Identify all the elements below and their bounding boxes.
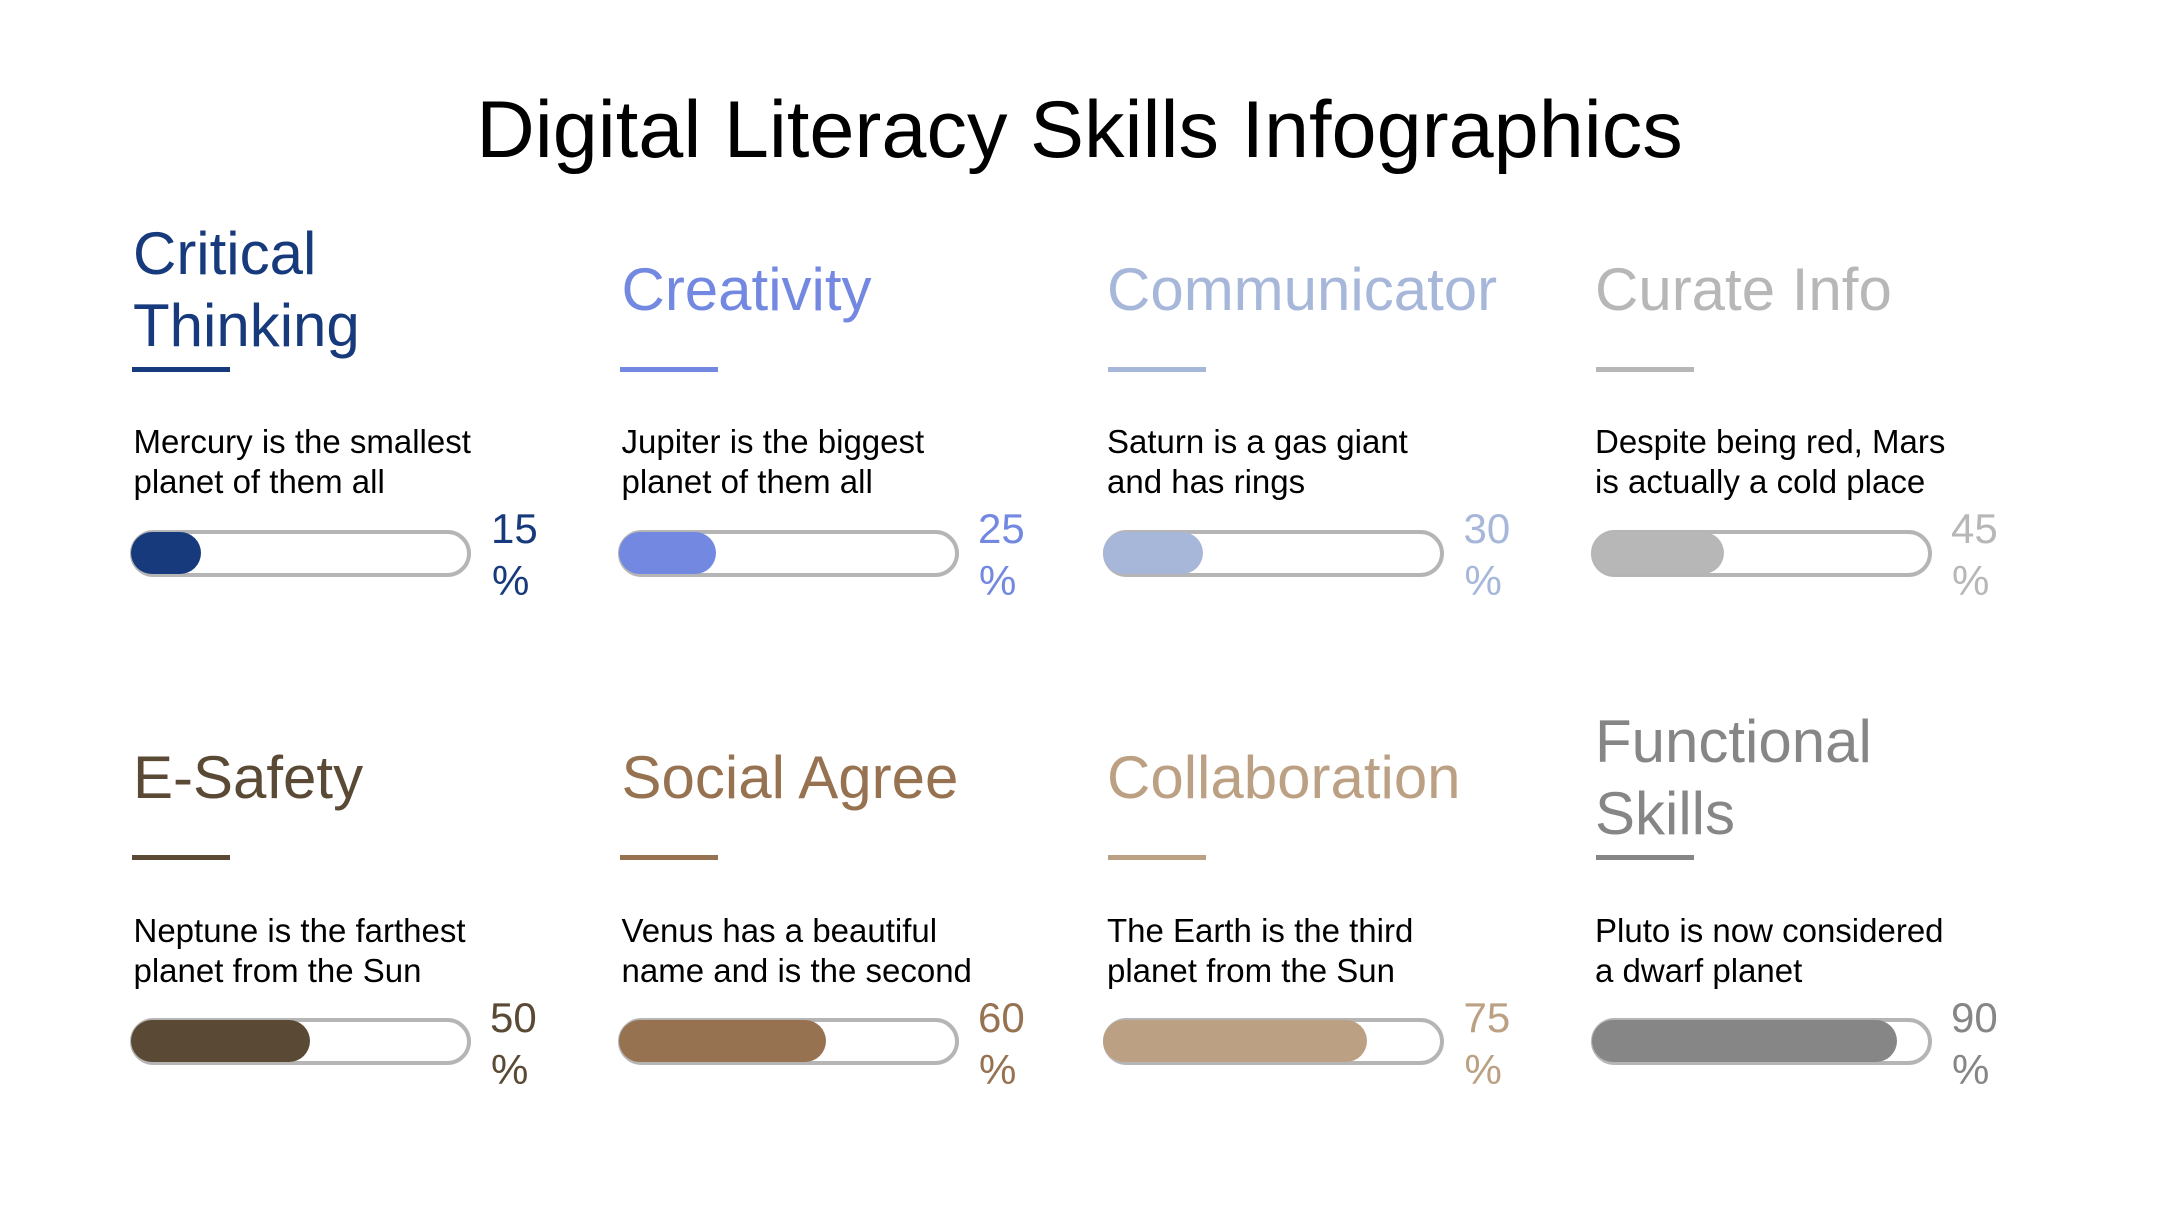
description: Pluto is now considered (1595, 912, 1944, 949)
heading: Critical Thinking: Thinking (133, 292, 360, 359)
progress track (1103, 530, 1444, 577)
percentage label (1464, 505, 1510, 604)
heading: Functional Skills: Skills (1595, 780, 1735, 847)
description: a dwarf planet (1595, 952, 1802, 989)
heading: Critical Thinking: Critical (133, 220, 316, 287)
heading: Creativity: Creativity (622, 256, 872, 323)
percentage label: % (1464, 1046, 1502, 1093)
panel: E-Safety (130, 744, 537, 1093)
progress track (1591, 1018, 1932, 1065)
progress fill 60% (619, 1020, 826, 1062)
heading rule (1596, 855, 1694, 860)
description (1107, 423, 1408, 500)
heading: Curate Info: Curate Info (1595, 256, 1892, 323)
description: planet of them all (622, 463, 873, 500)
heading rule (1596, 367, 1694, 372)
percentage label: 15 (491, 505, 538, 552)
percentage label (490, 994, 537, 1093)
title: Digital Literacy Skills Infographics (476, 85, 1683, 175)
progress fill 45% (1592, 532, 1724, 574)
heading rule (620, 367, 718, 372)
panel: Communicator (1103, 256, 1510, 604)
description: is actually a cold place (1595, 463, 1925, 500)
description (134, 912, 466, 989)
progress track (618, 1018, 959, 1065)
description: planet of them all (134, 463, 385, 500)
percentage label: 75 (1464, 994, 1510, 1041)
description (134, 423, 471, 500)
heading rule (132, 855, 230, 860)
description (622, 912, 972, 989)
heading rule (1108, 855, 1206, 860)
heading: Collaboration: Collaboration (1107, 744, 1461, 811)
heading rule (132, 367, 230, 372)
heading: Social Agree: Social Agree (622, 744, 958, 811)
percentage label: % (1464, 557, 1502, 604)
panel: Curate Info (1591, 256, 1998, 604)
percentage label: 25 (978, 505, 1025, 552)
percentage label: % (492, 557, 529, 604)
percentage label: % (1952, 1046, 1989, 1093)
progress fill 15% (131, 532, 201, 574)
percentage label: % (979, 557, 1016, 604)
description: Despite being red, Mars (1595, 423, 1945, 460)
heading rule (1108, 367, 1206, 372)
progress fill 50% (131, 1020, 310, 1062)
progress track (130, 1018, 471, 1065)
heading rule (620, 855, 718, 860)
description: Mercury is the smallest (134, 423, 471, 460)
panel: Critical Thinking (130, 220, 538, 604)
percentage label (978, 505, 1025, 604)
description (1595, 912, 1944, 989)
percentage label (978, 994, 1025, 1093)
panel: Functional Skills (1591, 708, 1998, 1093)
percentage label: 30 (1464, 505, 1510, 552)
percentage label: 50 (490, 994, 537, 1041)
description: Venus has a beautiful (622, 912, 937, 949)
panel: Social Agree (618, 744, 1025, 1093)
description: and has rings (1107, 463, 1305, 500)
progress track (1103, 1018, 1444, 1065)
heading: Functional Skills (1595, 708, 1872, 847)
percentage label (1951, 994, 1998, 1093)
progress track (1591, 530, 1932, 577)
percentage label: % (1952, 557, 1989, 604)
percentage label: % (979, 1046, 1016, 1093)
progress fill 90% (1592, 1020, 1897, 1062)
description: Saturn is a gas giant (1107, 423, 1408, 460)
heading: Critical Thinking (133, 220, 360, 359)
heading: Communicator: Communicator (1107, 256, 1497, 323)
percentage label (1951, 505, 1998, 604)
percentage label: 60 (978, 994, 1025, 1041)
progress track (618, 530, 959, 577)
description: name and is the second (622, 952, 972, 989)
panel: Collaboration (1103, 744, 1510, 1093)
percentage label (491, 505, 538, 604)
description: Neptune is the farthest (134, 912, 466, 949)
percentage label (1464, 994, 1510, 1093)
description: The Earth is the third (1107, 912, 1413, 949)
progress fill 25% (619, 532, 716, 574)
progress fill 75% (1103, 1020, 1367, 1062)
percentage label: % (491, 1046, 528, 1093)
description: planet from the Sun (1107, 952, 1395, 989)
heading: E-Safety: E-Safety (133, 744, 363, 811)
description (1107, 912, 1413, 989)
percentage label: 90 (1951, 994, 1998, 1041)
panel: Creativity (618, 256, 1025, 604)
description: Jupiter is the biggest (622, 423, 924, 460)
description (622, 423, 924, 500)
progress fill 30% (1103, 532, 1203, 574)
heading: Functional Skills: Functional (1595, 708, 1872, 775)
progress track (130, 530, 471, 577)
description (1595, 423, 1945, 500)
description: planet from the Sun (134, 952, 422, 989)
percentage label: 45 (1951, 505, 1998, 552)
